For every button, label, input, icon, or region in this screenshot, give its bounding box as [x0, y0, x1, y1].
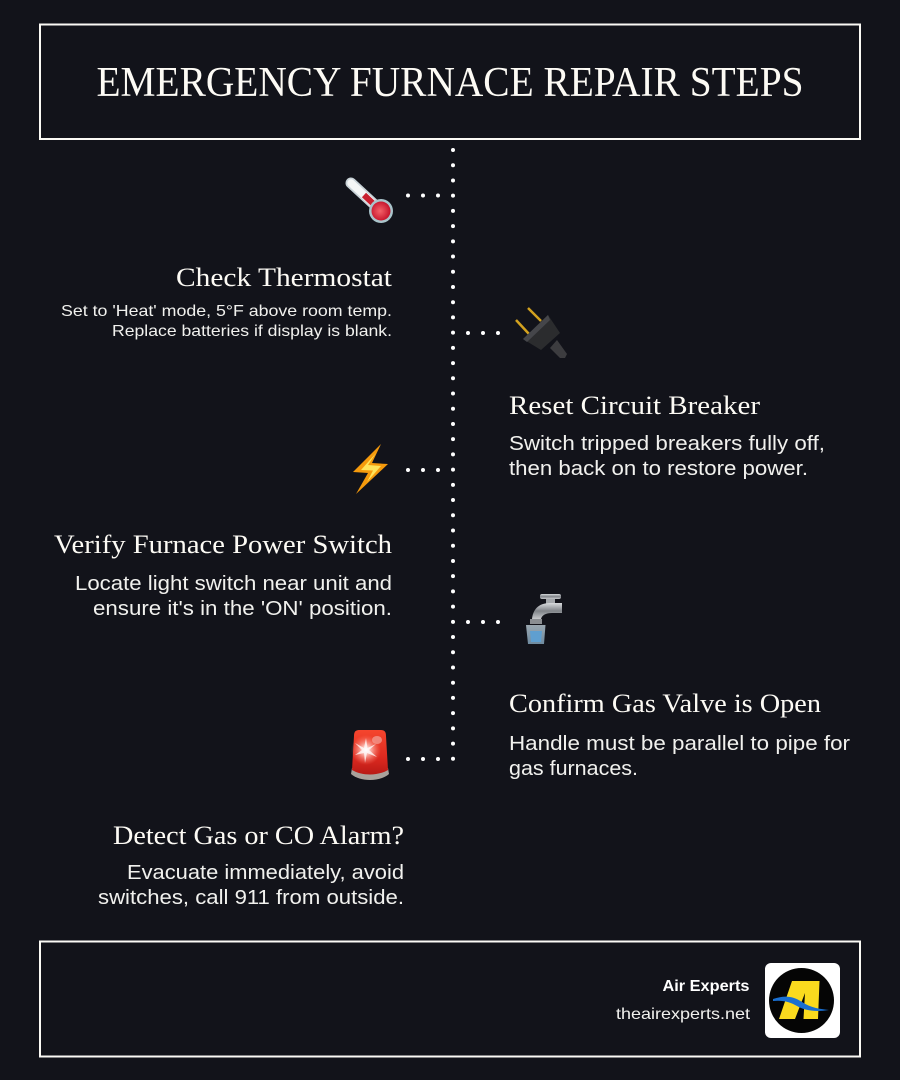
brand name: Air Experts: [662, 978, 750, 995]
step 3 description: [75, 573, 392, 620]
step 5 description: switches, call 911 from outside.: [98, 887, 404, 909]
icon: lightning bolt: [353, 444, 388, 494]
logo: [765, 963, 840, 1038]
website: theairexperts.net: [616, 1006, 751, 1023]
step 1 description: [61, 303, 392, 340]
step 3 heading: Verify Furnace Power Switch: [54, 530, 392, 559]
step 5: detect gas or CO alarm: [98, 730, 404, 909]
step 4 description: [509, 733, 850, 780]
icon: faucet with glass: [526, 594, 562, 644]
step 3: verify furnace power switch: [54, 444, 392, 620]
title: EMERGENCY FURNACE REPAIR STEPS: [96, 58, 804, 105]
icon: plug: [516, 308, 567, 358]
step 2 description: Switch tripped breakers fully off,: [509, 433, 825, 455]
step 1 description: Set to 'Heat' mode, 5°F above room temp.: [61, 303, 392, 320]
icon: siren: [351, 730, 389, 780]
step 5 heading: Detect Gas or CO Alarm?: [113, 821, 404, 850]
step 2 heading: Reset Circuit Breaker: [509, 391, 760, 420]
step 5 description: Evacuate immediately, avoid: [127, 862, 404, 884]
step 1: check thermostat: [61, 183, 393, 340]
step 4 description: gas furnaces.: [509, 758, 638, 780]
step 2 description: then back on to restore power.: [509, 458, 808, 480]
step 3 description: Locate light switch near unit and: [75, 573, 392, 595]
timeline dotted connectors: [408, 150, 499, 760]
step 4 heading: Confirm Gas Valve is Open: [509, 689, 821, 718]
step 3 description: ensure it's in the 'ON' position.: [93, 598, 392, 620]
step 2 description: [509, 433, 825, 480]
step 5 description: [98, 862, 404, 909]
step 4: confirm gas valve: [509, 594, 850, 780]
step 1 description: Replace batteries if display is blank.: [112, 323, 392, 340]
step 1 heading: Check Thermostat: [176, 263, 393, 292]
icon: thermometer: [351, 183, 393, 223]
step 4 description: Handle must be parallel to pipe for: [509, 733, 850, 755]
header panel: [40, 24, 860, 139]
footer panel: [40, 942, 860, 1056]
step 2: reset circuit breaker: [509, 308, 825, 480]
